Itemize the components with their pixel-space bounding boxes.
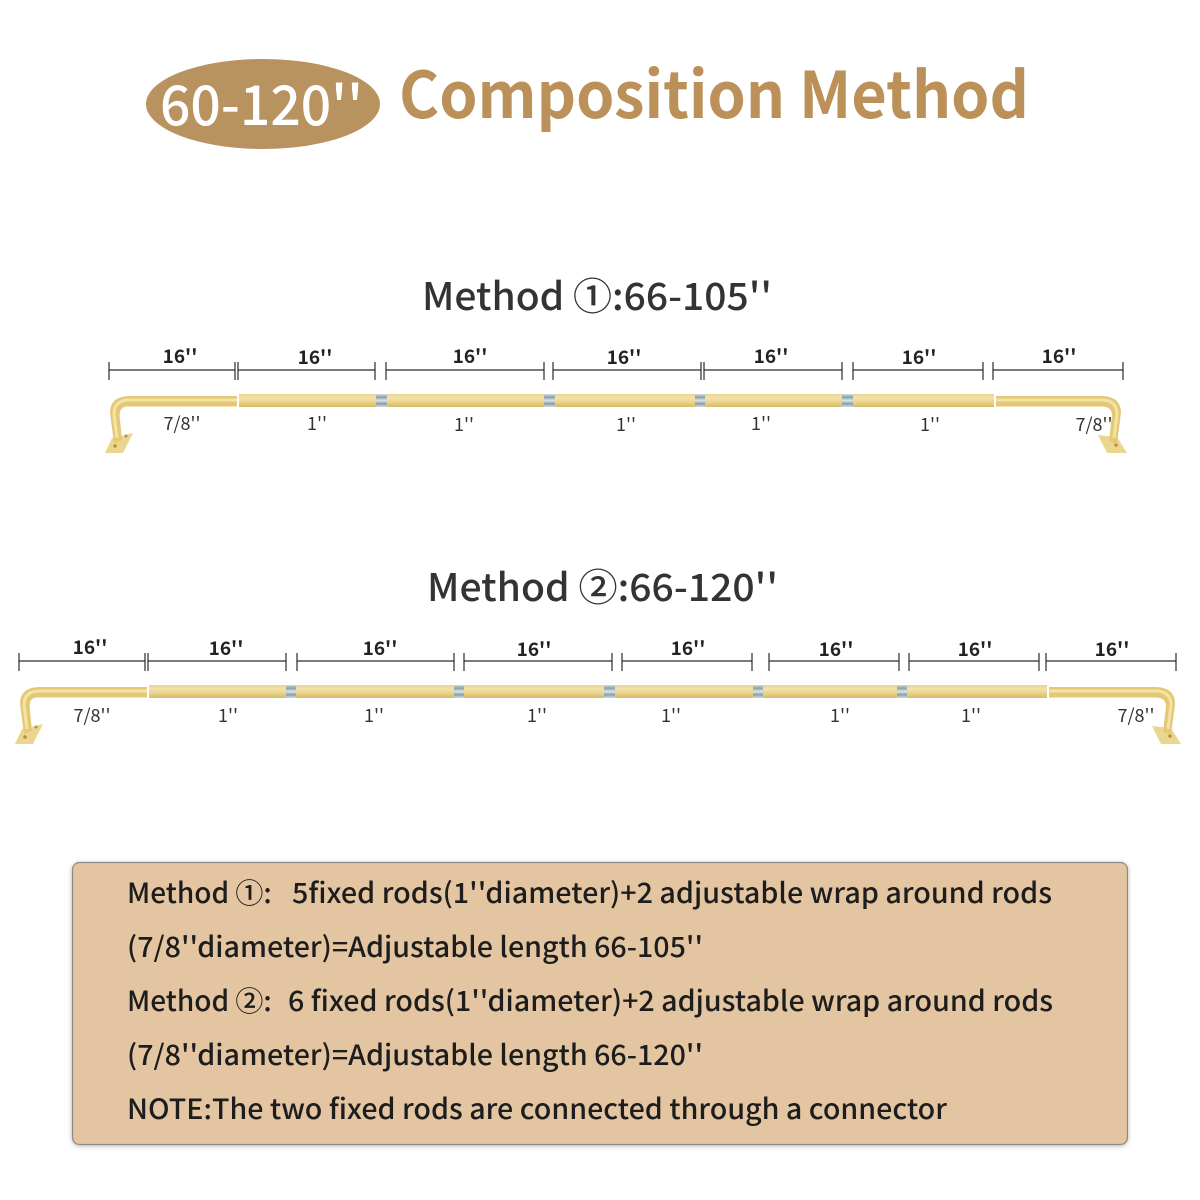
segment length labels: method 2: 16'' xyxy=(517,635,551,662)
diameter labels: method 1: 1'' xyxy=(454,411,474,437)
segment length labels: method 1: 16'' xyxy=(298,343,332,370)
diameter labels: method 2: 1'' xyxy=(527,702,547,728)
left wrap-around rod xyxy=(105,396,237,453)
segment length labels: method 1: 16'' xyxy=(754,342,788,369)
segment length labels: method 1: 16'' xyxy=(453,342,487,369)
heading: Composition Method: Composition Method xyxy=(399,45,1029,137)
connectors: method 1 xyxy=(376,394,853,407)
text: method 2 description xyxy=(127,980,1053,1074)
diameter labels: method 2: 1'' xyxy=(364,702,384,728)
diameter labels: method 2: 1'' xyxy=(661,702,681,728)
segment length labels: method 1: 16'' xyxy=(902,343,936,370)
text: method 1 description: 5fixed rods(1''diameter)+2 adjustable wrap around rods xyxy=(292,872,1052,912)
right wrap-around rod xyxy=(996,396,1127,453)
diagram: method 1 rod assembly xyxy=(105,342,1127,453)
diameter labels: method 1: 7/8'' xyxy=(163,410,201,436)
segment length labels: method 2: 16'' xyxy=(209,634,243,661)
text: method 1 description xyxy=(127,872,1052,966)
badge: 60-120 inch oval: 60-120'' xyxy=(160,61,363,141)
left wrap-around rod xyxy=(15,687,147,744)
diameter labels: method 1: 1'' xyxy=(751,410,771,436)
segment length labels: method 2 xyxy=(73,633,1129,662)
dimension lines: method 1 segments xyxy=(109,362,1123,380)
diagram: method 2 rod assembly xyxy=(15,633,1181,744)
diameter labels: method 1: 1'' xyxy=(616,411,636,437)
fixed rods: method 2 xyxy=(149,685,1047,698)
panel: composition notes xyxy=(72,862,1128,1144)
dimension lines: method 2 segments xyxy=(19,653,1176,671)
diameter labels: method 2: 1'' xyxy=(961,702,981,728)
segment length labels: method 2: 16'' xyxy=(363,634,397,661)
right wrap-around rod xyxy=(1049,687,1181,744)
diameter labels: method 2: 1'' xyxy=(218,702,238,728)
diameter labels: method 1: 1'' xyxy=(307,410,327,436)
text: note: NOTE:The two fixed rods are connected through a connector xyxy=(127,1088,948,1128)
diameter labels: method 2: 7/8'' xyxy=(73,702,111,728)
segment length labels: method 2: 16'' xyxy=(819,635,853,662)
fixed rods: method 1 xyxy=(239,394,994,407)
segment length labels: method 1 xyxy=(163,342,1076,370)
segment length labels: method 1: 16'' xyxy=(163,342,197,369)
segment length labels: method 1: 16'' xyxy=(1042,342,1076,369)
text: method 2 description: (7/8''diameter)=Adjustable length 66-120'' xyxy=(127,1034,703,1074)
segment length labels: method 2: 16'' xyxy=(73,633,107,660)
heading: method 1: Method ①:66-105'' xyxy=(422,266,772,321)
text: method 1 description: Method ①: xyxy=(127,872,272,912)
diameter labels: method 1: 7/8'' xyxy=(1075,411,1113,437)
diameter labels: method 1: 1'' xyxy=(920,411,940,437)
diameter labels: method 2: 1'' xyxy=(830,702,850,728)
connectors: method 2 xyxy=(286,685,907,698)
diameter labels: method 1 xyxy=(163,410,1113,437)
segment length labels: method 2: 16'' xyxy=(671,634,705,661)
title: 60-120 inch badge and Composition Method xyxy=(146,45,1029,149)
segment length labels: method 2: 16'' xyxy=(1095,635,1129,662)
text: method 2 description: Method ②: xyxy=(127,980,272,1020)
segment length labels: method 1: 16'' xyxy=(607,343,641,370)
diameter labels: method 2 xyxy=(73,702,1155,728)
text: method 1 description: (7/8''diameter)=Adjustable length 66-105'' xyxy=(127,926,703,966)
text: method 2 description: 6 fixed rods(1''diameter)+2 adjustable wrap around rods xyxy=(288,980,1053,1020)
segment length labels: method 2: 16'' xyxy=(958,635,992,662)
heading: method 2: Method ②:66-120'' xyxy=(427,557,778,612)
diameter labels: method 2: 7/8'' xyxy=(1117,702,1155,728)
